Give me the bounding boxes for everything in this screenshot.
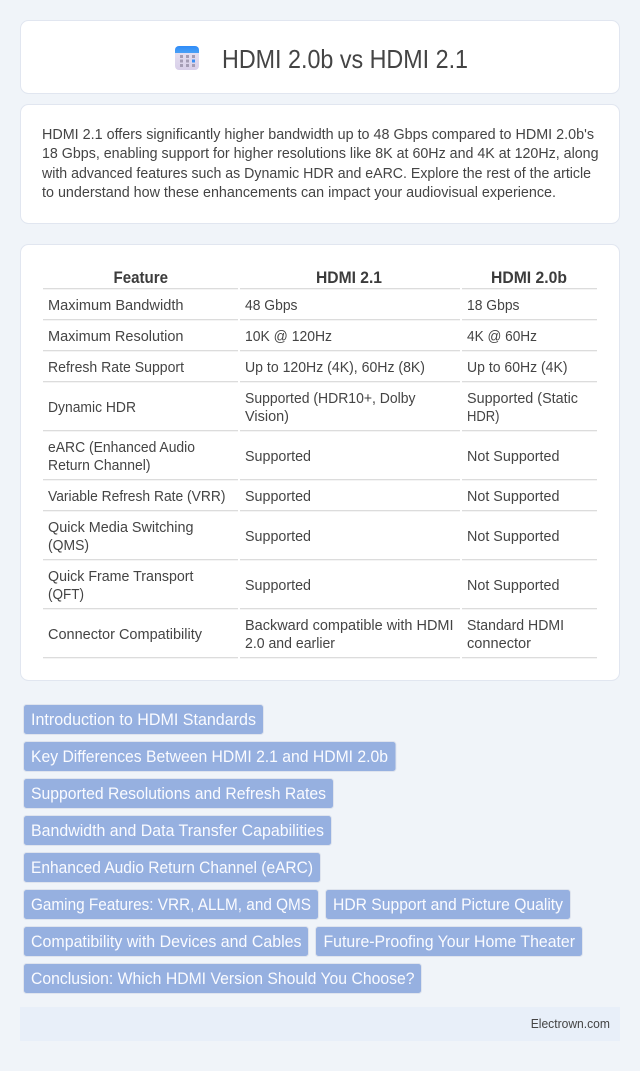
- chip: introduction: [24, 704, 264, 734]
- table header: Feature: [114, 269, 168, 287]
- panel: comparison table: [20, 244, 620, 680]
- row: variable refresh rate: Supported: [245, 488, 311, 505]
- chip: eARC: [24, 852, 320, 882]
- row: dynamic HDR: Supported (Static: [467, 390, 578, 407]
- row: quick frame transport: (QFT): [48, 586, 84, 603]
- footer: Electrown.com: [531, 1017, 610, 1031]
- row: maximum bandwidth: 48 Gbps: [245, 297, 298, 314]
- row: eARC: eARC (Enhanced Audio: [48, 439, 195, 456]
- chip: key differences: Key Differences Between HDMI 2.1 and HDMI 2.0b: [31, 747, 388, 766]
- row: refresh rate support: [48, 359, 568, 376]
- panel: title card: [20, 20, 620, 94]
- intro paragraph: with advanced features such as Dynamic HDR and eARC. Explore the rest of the article: [41, 165, 591, 182]
- chip: bandwidth: Bandwidth and Data Transfer Capabilities: [31, 821, 324, 840]
- row: eARC: Supported: [245, 448, 311, 465]
- row: variable refresh rate: Variable Refresh Rate (VRR): [48, 488, 226, 505]
- intro paragraph: to understand how these enhancements can impact your audiovisual experience.: [42, 184, 556, 201]
- row: eARC: Return Channel): [48, 457, 151, 474]
- row: dynamic HDR: Dynamic HDR: [48, 399, 136, 416]
- row: quick media switching: Supported: [245, 528, 311, 545]
- intro paragraph: HDMI 2.1 offers significantly higher bandwidth up to 48 Gbps compared to HDMI 2.0b's: [42, 126, 594, 143]
- chip: HDR support: HDR Support and Picture Quality: [333, 895, 564, 914]
- row: variable refresh rate: Not Supported: [467, 488, 560, 505]
- row: connector compatibility: [48, 617, 564, 652]
- chip: gaming features: Gaming Features: VRR, ALLM, and QMS: [31, 895, 311, 914]
- row: refresh rate support: Up to 60Hz (4K): [467, 359, 568, 376]
- chip: eARC: Enhanced Audio Return Channel (eARC): [31, 858, 313, 877]
- chip: HDR support: [326, 890, 570, 920]
- row: dynamic HDR: HDR): [467, 408, 500, 425]
- footer: [20, 1007, 620, 1041]
- row: connector compatibility: connector: [467, 635, 531, 652]
- row: maximum resolution: [48, 328, 537, 345]
- row: maximum resolution: 10K @ 120Hz: [245, 328, 332, 345]
- row: quick media switching: (QMS): [48, 537, 89, 554]
- row: quick frame transport: Supported: [245, 577, 311, 594]
- chip: bandwidth: [24, 816, 332, 846]
- row: quick frame transport: [48, 568, 560, 603]
- chip: supported resolutions: Supported Resolutions and Refresh Rates: [31, 784, 326, 803]
- chip: future-proofing: [316, 926, 582, 956]
- row: quick media switching: Quick Media Switching: [48, 519, 194, 536]
- row: connector compatibility: Connector Compatibility: [48, 626, 202, 643]
- row: dynamic HDR: Supported (HDR10+, Dolby: [245, 390, 416, 407]
- chip: conclusion: Conclusion: Which HDMI Version Should You Choose?: [31, 969, 414, 988]
- row: connector compatibility: Standard HDMI: [467, 617, 564, 634]
- chip: compatibility: Compatibility with Devices and Cables: [31, 932, 302, 951]
- chip: future-proofing: Future-Proofing Your Home Theater: [324, 932, 575, 951]
- intro paragraph: 18 Gbps, enabling support for higher resolutions like 8K at 60Hz and 4K at 120Hz, along: [42, 145, 598, 162]
- row: dynamic HDR: [48, 390, 578, 425]
- row: quick media switching: Not Supported: [467, 528, 560, 545]
- row: maximum resolution: 4K @ 60Hz: [467, 328, 537, 345]
- chip: introduction: Introduction to HDMI Standards: [31, 710, 256, 729]
- row: dynamic HDR: Vision): [245, 408, 289, 425]
- row: refresh rate support: Refresh Rate Support: [48, 359, 185, 376]
- panel: introduction: [20, 104, 620, 224]
- row: maximum bandwidth: 18 Gbps: [467, 297, 520, 314]
- row: quick frame transport: Quick Frame Transport: [48, 568, 194, 585]
- chip: compatibility: [24, 926, 308, 956]
- chip: supported resolutions: [24, 778, 334, 808]
- title: HDMI 2.0b vs HDMI 2.1: [222, 44, 468, 74]
- row: connector compatibility: Backward compatible with HDMI: [245, 617, 454, 634]
- icon: calendar: [175, 46, 199, 70]
- row: eARC: [48, 439, 560, 474]
- table header: HDMI 2.0b: [491, 269, 567, 287]
- intro paragraph: [41, 126, 599, 201]
- row: eARC: Not Supported: [467, 448, 560, 465]
- chip: conclusion: [24, 964, 422, 994]
- panel: topic chips: [24, 704, 582, 994]
- chip: key differences: [24, 742, 396, 772]
- row: refresh rate support: Up to 120Hz (4K), 60Hz (8K): [245, 359, 425, 376]
- chip: gaming features: [24, 890, 318, 920]
- row: maximum bandwidth: Maximum Bandwidth: [48, 297, 184, 314]
- table header: [114, 269, 567, 287]
- row: quick frame transport: Not Supported: [467, 577, 560, 594]
- row: connector compatibility: 2.0 and earlier: [245, 635, 335, 652]
- table header: HDMI 2.1: [316, 269, 382, 287]
- row: quick media switching: [48, 519, 560, 554]
- row: variable refresh rate: [48, 488, 560, 505]
- row: maximum resolution: Maximum Resolution: [48, 328, 184, 345]
- row: maximum bandwidth: [48, 297, 520, 314]
